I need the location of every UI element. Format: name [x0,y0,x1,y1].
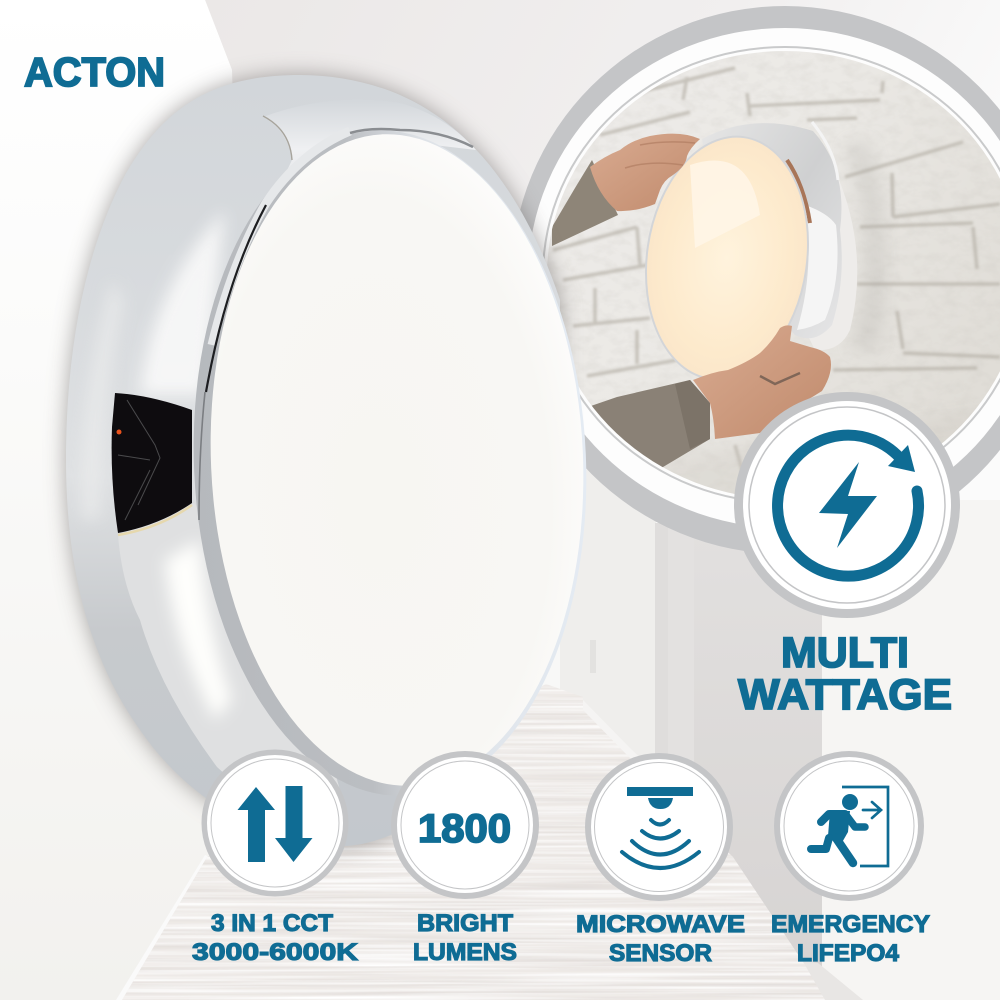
dark reflection patch [112,393,192,535]
lower sleeve [585,380,710,470]
feature: CCT [192,750,359,966]
label: microwave sensor: MICROWAVE [576,911,745,938]
label: 3 in 1 CCT [192,910,359,966]
heading: multi wattage: WATTAGE [738,671,952,719]
photo: hands fitting lamp on a brick wall [540,40,1000,520]
lamp wall plate [810,180,858,350]
photo ring frame [511,6,1000,554]
multi wattage badge [734,392,960,618]
label: microwave sensor: SENSOR [609,940,712,967]
badge with arrows icon [202,750,348,896]
soft upper highlight [140,210,225,395]
top lobe [266,114,476,168]
upper hand [590,134,700,211]
label: bright lumens: LUMENS [413,939,517,966]
chrome body [66,75,560,846]
main ceiling light fixture [66,75,600,846]
badge with sensor icon [585,753,733,901]
fixture shadow [66,75,560,846]
label: 3 in 1 CCT: 3000-6000K [192,939,359,966]
outer left highlight [86,297,120,514]
lens rim [180,122,600,804]
striped floor [120,680,865,1000]
label: emergency LiFePO4 [771,911,930,967]
lower white glow [165,540,232,720]
label: emergency LiFePO4: LIFEPO4 [797,940,900,967]
feature: emergency [771,751,930,967]
lower hand [693,325,831,439]
product title: ACTON [24,49,165,95]
label: emergency LiFePO4: EMERGENCY [771,911,930,938]
badge with running man icon [774,751,924,901]
lamp chrome housing [645,121,842,378]
badge with 1800: 1800 [418,807,511,851]
glowing lens [647,138,807,376]
label: bright lumens: BRIGHT [417,910,513,937]
upper sleeve [552,160,618,246]
chrome reflections [82,100,476,815]
feature: lumens [391,751,539,966]
feature: microwave sensor [576,753,745,967]
label: microwave sensor [576,911,745,967]
installation photo circle [511,6,1000,554]
label: 3 in 1 CCT: 3 IN 1 CCT [211,910,333,937]
label: bright lumens [413,910,517,966]
heading: multi wattage [738,629,952,719]
white diffuser lens [197,126,597,794]
brick wall [540,40,1000,520]
badge with 1800 [391,751,539,899]
heading: multi wattage: MULTI [781,629,909,677]
lower inner band [118,528,339,786]
icon: power cycle bolt [778,435,919,576]
